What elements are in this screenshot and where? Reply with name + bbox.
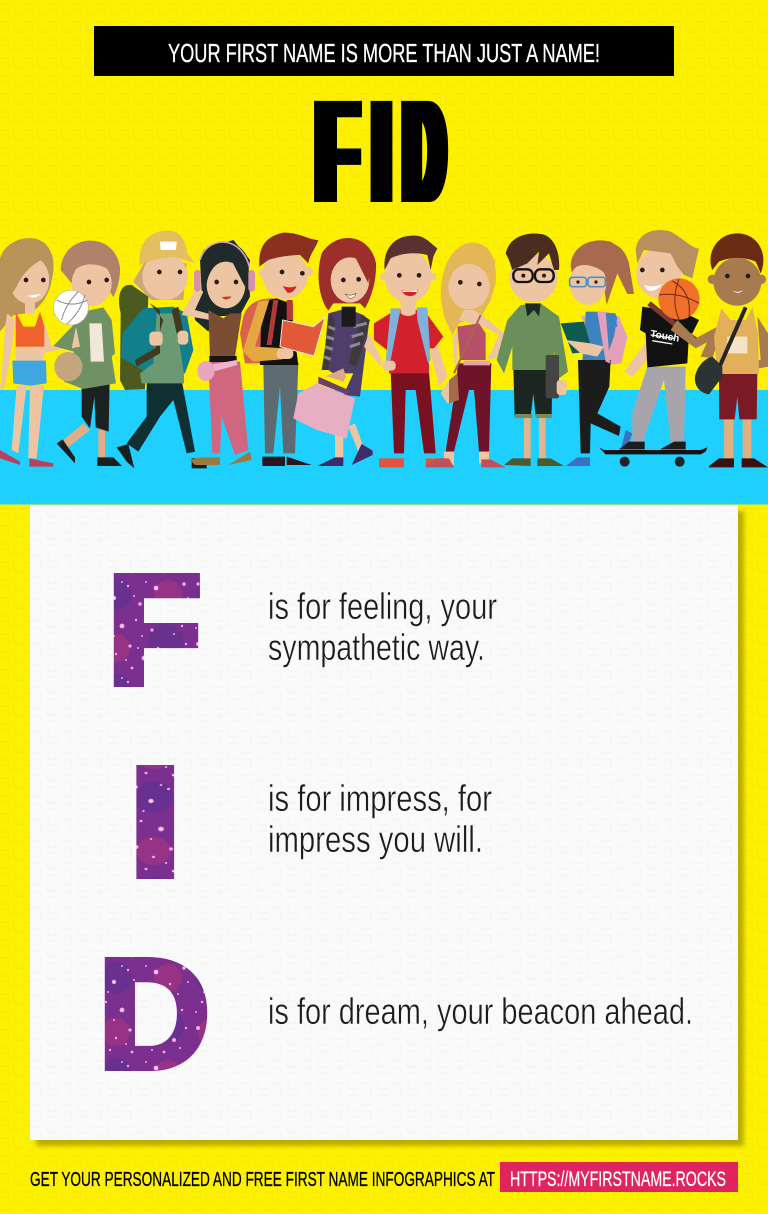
text: F line: is for feeling, your (268, 586, 497, 627)
header banner (94, 26, 674, 76)
character: skater with basketball: Touch (649, 329, 680, 345)
illustration: row of young people, right half (364, 230, 768, 467)
white content panel (30, 505, 744, 1146)
footer link badge (500, 1162, 738, 1192)
illustration: row of young people, left half (0, 231, 376, 468)
header banner: YOUR FIRST NAME IS MORE THAN JUST A NAME! (168, 38, 600, 68)
title: FID: F (316, 70, 358, 234)
character: girl with ponytail and tablet (561, 240, 634, 466)
text: I line: is for impress, for (268, 778, 492, 819)
title: FID: I (373, 70, 390, 234)
letter I with galaxy fill: I (128, 735, 182, 908)
text: I line: impress you will. (268, 819, 483, 860)
text: F line: sympathetic way. (268, 627, 485, 668)
text: I line (268, 778, 492, 860)
letter D with galaxy fill: D (98, 928, 210, 1100)
character: boy with book and backpack (240, 233, 325, 466)
character: boy in red shirt (364, 236, 454, 467)
character: skater with basketball (599, 230, 721, 467)
blue floor band (0, 390, 768, 504)
letter F with galaxy fill: F (108, 544, 202, 716)
character: boy in basketball jersey (695, 233, 768, 467)
text: D (404, 70, 444, 234)
character: girl with headphones (182, 240, 255, 465)
character: girl with volleyball (53, 241, 122, 466)
character: boy with glasses (497, 234, 568, 466)
text: F line (268, 586, 497, 668)
character: girl in orange top (0, 238, 78, 467)
character: blonde girl (426, 243, 506, 467)
character: hiker with backpack and cap (117, 231, 207, 468)
character: girl with pink case (293, 238, 376, 466)
footer call to action: GET YOUR PERSONALIZED AND FREE FIRST NAME INFOGRAPHICS AT (30, 1169, 495, 1191)
